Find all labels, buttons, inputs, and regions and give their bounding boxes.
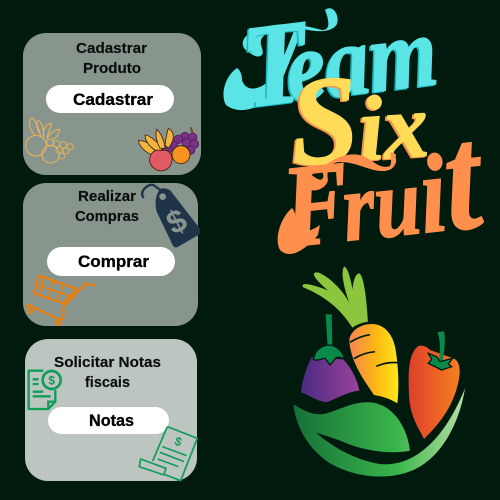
panel heading: fiscais bbox=[85, 375, 130, 391]
panel heading: Compras bbox=[75, 209, 139, 225]
swash: T top and tail bbox=[223, 8, 338, 110]
panel heading bbox=[76, 41, 147, 77]
panel: solicitar notas fiscais bbox=[25, 339, 197, 481]
title word: team: Team bbox=[235, 0, 444, 133]
title word: six: Six bbox=[283, 44, 430, 193]
icon: fruit outline bbox=[26, 118, 73, 163]
panel background bbox=[23, 33, 201, 175]
button: notas bbox=[48, 407, 169, 434]
button: comprar bbox=[47, 247, 175, 276]
button: cadastrar bbox=[46, 85, 174, 113]
eggplant bbox=[301, 314, 359, 402]
leaf bowl bbox=[293, 388, 465, 477]
icon: invoice with coin: $ bbox=[48, 373, 55, 387]
panel heading: Cadastrar bbox=[76, 41, 147, 57]
panel heading: Solicitar Notas bbox=[54, 355, 161, 371]
panel heading bbox=[54, 355, 161, 391]
title: team six fruit bbox=[223, 0, 491, 279]
icon: shopping cart bbox=[27, 276, 95, 325]
panel: realizar compras bbox=[23, 183, 200, 326]
icon: invoice with coin bbox=[29, 371, 61, 409]
panel heading: Produto bbox=[83, 61, 141, 77]
button: comprar: Comprar bbox=[78, 253, 150, 271]
button: notas: Notas bbox=[89, 412, 134, 430]
carrot top bbox=[303, 267, 368, 328]
carrot bbox=[349, 324, 398, 403]
icon: coloured fruit bbox=[138, 127, 199, 171]
panel heading bbox=[75, 189, 139, 225]
panel background bbox=[23, 183, 198, 326]
swash: F top and tail bbox=[278, 152, 396, 254]
icon: price tag: $ bbox=[160, 201, 193, 241]
panel background bbox=[25, 339, 197, 481]
panel: cadastrar produto bbox=[23, 33, 201, 175]
button: cadastrar: Cadastrar bbox=[73, 91, 154, 109]
pepper bbox=[409, 331, 460, 439]
title word: team: Team bbox=[234, 0, 442, 135]
title word: fruit: Fruit bbox=[272, 93, 491, 279]
logo: vegetables bbox=[293, 267, 465, 477]
panel heading: Realizar bbox=[78, 189, 136, 205]
icon: price tag bbox=[142, 185, 200, 248]
icon: receipt bbox=[139, 427, 197, 481]
title word: six: Six bbox=[285, 43, 432, 192]
icon: receipt: $ bbox=[173, 434, 184, 449]
